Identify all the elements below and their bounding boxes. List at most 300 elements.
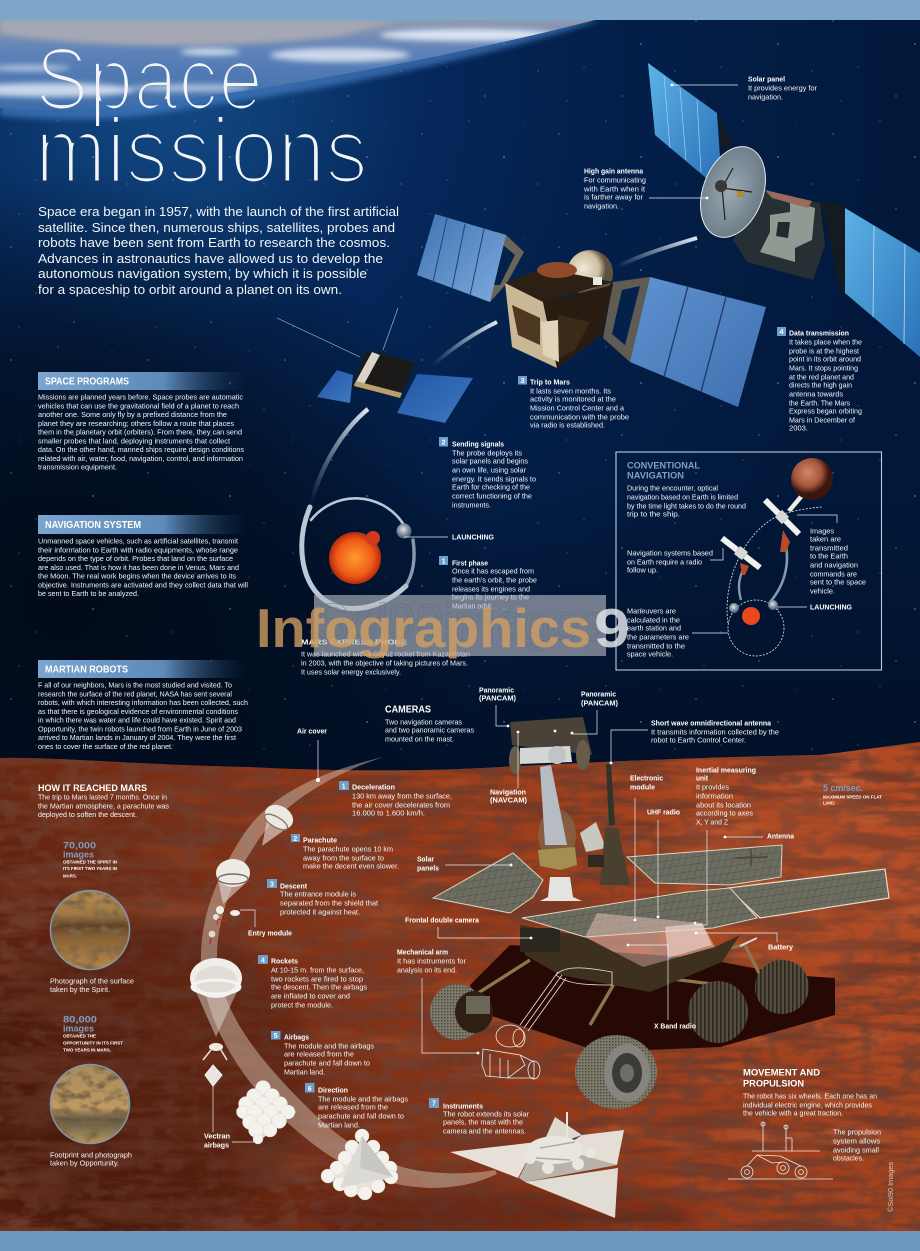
step 5: airbags [271,1031,374,1077]
rover left solar panel [433,853,543,913]
intro paragraph: satellite. Since then, numerous ships, satellites, probes and [38,220,395,235]
label: short wave antenna: robot to Earth Control Center. [651,736,746,745]
text: mars express probe: in 2003, with the objective of taking pictures of Mars. [301,659,468,668]
label: vectran airbags: Vectran [204,1134,230,1141]
dome [567,250,613,296]
title: missions [35,100,368,202]
photo: surface by Spirit: Photograph of the surface [50,976,134,985]
step 2: sending signals: The probe deploys its [452,449,522,458]
probe body [733,190,825,280]
icon: lander petals with small rover [450,1112,624,1218]
label: launching [404,535,495,542]
step 3: trip to mars: 3 [521,378,525,385]
label: inertial measuring unit: information [696,792,733,801]
label: inertial measuring unit [696,768,756,827]
callout: solar panel: It provides energy for [748,84,818,93]
rover suspension [475,938,760,1025]
right solar panel [603,277,766,407]
rover front left wheel [430,984,493,1040]
text: mars express probe: It was launched with a Soyuz rocket from Kazakhstan [301,650,470,659]
icon: parachute capsule [216,859,250,904]
text: maneuvers: the parameters are [627,633,689,642]
icon: sun [329,531,381,584]
step 6: direction: Direction [318,1088,348,1095]
step 4: rockets: are inflated to cover and [271,992,350,1001]
stat: 70,000 images: 70,000 [63,840,96,852]
rover lower mast [540,877,582,901]
panel: navigation system: are also used. That is how it has been done in Venus, Mars and [38,563,239,572]
text: mars express probe: It uses solar energy exclusively. [301,668,401,677]
panel: movement and propulsion: PROPULSION [743,1078,804,1088]
panel: martian robots: robots, with which interesting information has been collected, such [38,698,248,707]
label: inertial measuring unit: X, Y and Z [696,818,729,827]
heading: conventional navigation [627,460,700,482]
photo: footprint by Opportunity: taken by Opportunity. [50,1159,119,1168]
panel: navigation system: be sent to Earth to be analyzed. [38,589,139,598]
step labels for descent [204,781,530,1150]
rover translucent electronics box [585,913,715,967]
callout: solar panel: navigation. [748,93,783,102]
step 3: trip to mars: Mission Control Center and a [530,404,624,413]
label: panoramic right: Panoramic [581,692,616,699]
stat: 80,000 images [63,1014,123,1053]
step 2: sending signals: Sending signals [452,442,504,449]
step 4: data transmission: Mars in December of [789,416,855,425]
label: electronic module: Electronic [630,776,663,783]
text: cameras: CAMERAS [385,704,431,716]
step 4: rockets: the descent. Then the airbags [271,983,367,992]
label: panoramic left [479,688,516,703]
step 3: descent: 3 [270,882,274,889]
step 4: data transmission [777,327,862,433]
label: vectran airbags [204,1134,230,1150]
text: radio follow up: follow up. [627,566,658,575]
step 4: data transmission: 2003. [789,424,808,433]
step 4: data transmission: antenna towards [789,390,843,399]
step 4: data transmission: Data transmission [789,331,849,338]
text: images transmitted: sent to the space [810,578,866,587]
step 2: sending signals: solar panels and begins [452,457,528,466]
step 7: instruments: The robot extends its solar [443,1110,530,1119]
step 4: data transmission: point in its orbit around [789,355,861,364]
callout: solar panel: Solar panel [748,77,785,84]
rover body [520,925,740,992]
photo: footprint by Opportunity: Footprint and photograph [50,1150,132,1159]
label: launching: LAUNCHING [452,535,495,542]
spacecraft: upper probe [617,63,920,357]
panel: space programs: another one. Some only fly by a prefixed distance from the [38,410,227,419]
high gain dish [689,138,777,246]
icon: satellite lower [719,534,763,572]
step 4: rockets [258,955,367,1010]
step 7: instruments: 7 [432,1101,436,1108]
step 5: airbags: are released from the [284,1050,354,1059]
step 3: descent: The entrance module is [280,890,356,899]
callout: high gain antenna: navigation. [584,202,619,211]
step 4: data transmission: Express began orbiting [789,407,862,416]
label: inertial measuring unit: about its location [696,801,751,810]
watermark: Infographics [256,597,591,659]
text: cameras [385,704,474,744]
label: electronic module: module [630,785,655,792]
label: short wave antenna: It transmits information collected by the [651,728,779,737]
icon: opening airbags with petals [321,1129,398,1200]
step 2: sending signals [439,437,536,510]
step 1: deceleration: Deceleration [352,785,395,792]
panel: navigation system: objective. Instruments are activated and they collect data that will [38,580,248,589]
intro paragraph: Space era began in 1957, with the launch of the first artificial [38,204,399,219]
callout: high gain antenna: High gain antenna [584,169,643,176]
descent trajectory band [201,757,497,1188]
label: navigation navcam: (NAVCAM) [490,798,527,805]
text: images transmitted: commands are [810,570,857,579]
navigation orbit diagram [692,458,837,656]
step 4: data transmission: 4 [780,329,784,336]
callout: solar panel [671,77,818,102]
credit: ©Sol90 Images [886,1162,895,1212]
rover right solar panel [728,869,889,918]
callout: high gain antenna: For communicating [584,176,646,185]
step 1: first phase: releases its engines and [452,585,530,594]
step 3: trip to mars: activity is monitored at the [530,395,616,404]
step 2: parachute: make the decent even slower. [303,862,399,871]
text: maneuvers [627,607,689,659]
panel: movement and propulsion: The robot has six wheels. Each one has an [743,1092,877,1101]
step 2: parachute [291,834,399,871]
rover [430,717,889,1109]
text: images transmitted: transmitted [810,544,848,553]
photo: surface by Spirit [50,890,134,994]
orbit ring [302,498,414,608]
label: solar panels: panels [417,866,439,873]
step 2: sending signals: instruments. [452,501,491,510]
text: images transmitted: Images [810,527,834,536]
panel: navigation system: depends on the type of orbit. Probes that land on the surface [38,554,233,563]
step 1: first phase: First phase [452,561,488,568]
step 2: sending signals: energy. It sends signals to [452,475,536,484]
step 2: parachute: away from the surface to [303,854,384,863]
rover rear solar panel [627,845,782,885]
panel: how it reached mars: HOW IT REACHED MARS [38,783,148,794]
stat: maximum speed: 5 cm/sec. [823,783,863,794]
step 2: parachute: The parachute opens 10 km [303,845,393,854]
panel: movement and propulsion: individual electric engine, which provides [743,1101,872,1110]
panel: space programs: Missions are planned years before. Space probes are automatic [38,393,243,402]
intro paragraph: Advances in astronautics have allowed us to develop the [38,251,383,266]
step 7: instruments: Instruments [443,1104,483,1111]
step 4: data transmission: at the red planet and [789,373,854,382]
text: maneuvers: transmitted to the [627,642,685,651]
panel: space programs: related with air, water, food, navigation, control, and information [38,454,243,463]
panel: how it reached mars: The trip to Mars lasted 7 months. Once in [38,793,167,802]
callout: high gain antenna: is farther away for [584,193,644,202]
photo: footprint by Opportunity [50,1064,132,1168]
descent capsules [190,778,398,1200]
step 4: data transmission: directs the high gain [789,381,852,390]
step 6: direction: are released from the [318,1103,388,1112]
panel: space programs: vehicles that can use the gravitational field of a planet to reach [38,401,239,410]
panel: movement and propulsion: system allows [833,1137,880,1146]
rover antenna [606,764,615,826]
launch orbit diagram [302,409,414,608]
text: cameras: Two navigation cameras [385,718,462,727]
space background [0,20,920,780]
stat: 70,000 images: images [63,850,94,860]
step 5: airbags: The module and the airbags [284,1042,374,1051]
rover front camera block [520,928,560,952]
icon: vectran airbag cluster [236,1080,296,1144]
icon: mars [791,458,833,500]
label: mechanical arm: analysis on its end. [397,966,457,975]
step 2: sending signals: 2 [442,440,446,447]
step 4: data transmission: Mars. It stops pointing [789,364,858,373]
label: navigation navcam: Navigation [490,790,526,797]
watermark: 9 [594,597,630,659]
panel: space programs: planet they are researching; others follow a route that places [38,419,234,428]
rover rear wheels [688,960,809,1043]
mars ground [0,740,920,1240]
intro paragraph: autonomous navigation system, by which it is possible [38,266,367,281]
text: cameras: mounted on the mast. [385,735,454,744]
label: vectran airbags: airbags [204,1143,229,1150]
text: encounter: trip to the ship. [627,510,680,519]
step 4: rockets: Rockets [271,959,298,966]
stat: maximum speed: MAXIMUM SPEED ON FLAT [823,795,882,800]
text: encounter: During the encounter, optical [627,484,718,493]
label: air cover: Air cover [297,728,327,736]
trail [617,238,697,267]
photo: surface by Spirit: taken by the Spirit. [50,985,110,994]
step 5: airbags: Airbags [284,1035,309,1042]
step 1: first phase: Martian orbit. [452,602,493,611]
panel: how it reached mars [38,783,169,819]
step 5: airbags: parachute and fall down to [284,1059,370,1068]
rover gold collar [538,847,577,870]
label: uhf radio: UHF radio [647,810,680,817]
step 5: airbags: 5 [274,1033,278,1040]
text: images transmitted: taken are [810,535,841,544]
probe body [505,262,613,368]
rover front right wheel [575,1035,657,1109]
step 4: data transmission: probe is at the highest [789,347,859,356]
stat: 80,000 images: images [63,1024,94,1034]
panel: navigation system: NAVIGATION SYSTEM [45,519,141,531]
stat: 80,000 images: 80,000 [63,1014,97,1026]
icon: entry module [209,906,240,944]
rover shadow [470,945,835,1052]
rover pan cam head [509,717,592,774]
step 3: descent: Descent [280,884,308,891]
step 7: instruments [429,1098,530,1136]
step 3: trip to mars: It lasts seven months. Its [530,387,611,396]
rover mast column [540,765,567,845]
step 3: trip to mars: Trip to Mars [530,380,570,387]
text: mars express probe: MARS EXPRESS PROBE [301,638,407,647]
callout: high gain antenna [583,169,708,211]
icon: air cover capsule [261,778,320,846]
label: frontal double camera: Frontal double camera [405,918,479,925]
stat: 80,000 images: OPPORTUNITY IN ITS FIRST [63,1041,123,1046]
icon: earth positions [729,600,778,613]
step 1: deceleration: 1 [342,783,346,790]
step 2: parachute: Parachute [303,838,337,845]
trail [433,322,497,365]
label: mechanical arm: It has instruments for [397,957,467,966]
text: maneuvers: Maneuvers are [627,607,676,616]
stat: maximum speed: LAND. [823,801,835,806]
step 1: deceleration: 16.000 to 1.600 km/h. [352,809,425,818]
watermark: Sol90images [316,594,604,652]
label: panoramic left: (PANCAM) [479,696,516,703]
step 4: rockets: 4 [261,958,265,965]
text: maneuvers: space vehicle. [627,650,673,659]
text: maneuvers: calculated in the [627,616,680,625]
solar panel lower [820,201,920,357]
spacecraft: trip to mars probe [417,214,766,407]
step 4: data transmission: the Earth. The Mars [789,399,850,408]
title: Space [35,29,263,128]
step 1: deceleration: the air cover decelerates from [352,801,450,810]
step 1: deceleration: 130 km away from the surface, [352,792,452,801]
label: navigation navcam [490,790,527,805]
text: encounter: by the time light takes to do the round [627,502,746,511]
panel: martian robots: ones to cover the surface of the red planet. [38,742,173,751]
label: mechanical arm: Mechanical arm [397,950,448,957]
label: inertial measuring unit: Inertial measuring [696,768,756,775]
icon: satellite upper [761,496,803,538]
heading: conventional navigation: CONVENTIONAL [627,460,700,472]
panel: martian robots: arrived to Martian lands in January of 2004. They were the first [38,733,236,742]
step 6: direction: Martian land. [318,1121,360,1130]
text: radio follow up: Navigation systems based [627,549,713,558]
panel: space programs: them in the planetary orbit (orbiters). From there, they can send [38,428,242,437]
label: short wave antenna [651,721,779,745]
panel: movement and propulsion: MOVEMENT AND [743,1066,820,1078]
stat: 70,000 images: OBTAINED THE SPIRIT IN [63,860,118,865]
step 4: rockets: At 10-15 m. from the surface, [271,966,364,975]
step 1: first phase: 1 [442,558,446,565]
stat: 80,000 images: OBTAINED THE [63,1034,96,1039]
step 1: first phase: begins its journey to the [452,593,529,602]
step 4: rockets: protect the module. [271,1001,333,1010]
label: electronic module [630,776,663,792]
step 6: direction: parachute and fall down to [318,1112,404,1121]
text: cameras: and two panoramic cameras [385,726,474,735]
panel: movement and propulsion: the vehicle with a great traction. [743,1109,843,1118]
step 6: direction: 6 [308,1086,312,1093]
label: mechanical arm [397,950,467,975]
label: solar panels: Solar [417,857,434,864]
panel: movement and propulsion: obstacles. [833,1154,864,1163]
text: images transmitted: to the Earth [810,552,848,561]
text: encounter [627,484,746,519]
step 7: instruments: panels, the mast with the [443,1118,523,1127]
step 2: parachute: 2 [293,836,297,843]
step 3: descent [267,879,378,917]
label: inertial measuring unit: It provides [696,783,729,792]
label: antenna: Antenna [767,834,794,841]
title [35,29,368,202]
panel: martian robots: as that there is geological evidence of environmental conditions [38,707,238,716]
panel: conventional navigation [616,452,882,670]
label: inertial measuring unit: unit [696,776,709,783]
step 4: rockets: two rockets are fired to stop [271,975,363,984]
panel: martian robots: MARTIAN ROBOTS [45,664,128,676]
spacecraft: first small probe [277,308,473,423]
panel: movement and propulsion [728,1066,881,1179]
step 1: deceleration [339,781,452,818]
text: images transmitted: and navigation [810,561,858,570]
step 4: data transmission: It takes place when the [789,338,862,347]
step 2: sending signals: an own life, using solar [452,466,527,475]
stat: 70,000 images: ITS FIRST TWO YEARS IN [63,866,118,871]
text: maneuvers: earth station and [627,624,681,633]
text: mars express probe [301,638,470,677]
step 3: descent: protected it against heat. [280,908,360,917]
icon: rover side diagram [728,1122,833,1179]
step 1: first phase: the earth's orbit, the probe [452,576,537,585]
stat: maximum speed [823,783,882,806]
panel: space programs: smaller probes that land, deploying instruments that collect [38,436,230,445]
panel: martian robots: F all of our neighbors, Mars is the most studied and visited. To [38,681,232,690]
panel: space programs: data. On the other hand, manned ships require design conditions [38,445,244,454]
intro paragraph: for a spaceship to orbit around a planet on its own. [38,282,342,297]
step 1: first phase: Once it has escaped from [452,567,534,576]
panel: space programs [38,372,248,472]
text: radio follow up [627,549,713,575]
rover instruments cluster [538,809,630,885]
rover text labels [297,688,882,1031]
stat: 70,000 images [63,840,118,879]
panel: navigation system: their information to Earth with radio equipments, whose range [38,545,238,554]
panel: movement and propulsion: avoiding small [833,1146,879,1155]
earth limb [0,20,600,119]
step 2: sending signals: correct functioning of the [452,492,532,501]
panel: how it reached mars: deployed to soften the descent. [38,810,137,819]
label: panoramic right [581,692,618,708]
heading: conventional navigation: NAVIGATION [627,470,684,482]
icon: large parachute with lander [190,958,242,1086]
stat: 80,000 images: TWO YEARS IN MARS. [63,1048,111,1053]
panel: space programs: transmission equipment. [38,463,117,472]
label: x band radio: X Band radio [654,1024,696,1031]
step 1: first phase [439,556,537,611]
intro paragraph: robots have been sent from Earth to research the cosmos. [38,235,390,250]
text: images transmitted [810,527,866,596]
panel: how it reached mars: the Martian atmosphere, a parachute was [38,801,169,810]
stat: 70,000 images: MARS. [63,874,77,879]
panel: martian robots [38,660,248,751]
label: panoramic right: (PANCAM) [581,701,618,708]
text: radio follow up: on Earth require a radio [627,558,702,567]
step 3: trip to mars: via radio is established. [530,421,605,430]
trail toward probe [311,409,368,503]
panel: movement and propulsion: The propulsion [833,1128,881,1137]
step 5: airbags: Martian land. [284,1068,325,1077]
panel: martian robots: in which there was water and life could have existed. Spirit and [38,716,236,725]
step 6: direction: The module and the airbags [318,1095,408,1104]
step 6: direction [305,1083,408,1130]
rover leader lines [213,705,777,1142]
panel: navigation system [38,515,248,598]
icon: sun small [742,607,760,625]
left solar panel [417,214,524,302]
panel: space programs: SPACE PROGRAMS [45,376,129,388]
panel: martian robots: Opportunity, the twin robots launched from Earth in June of 2003 [38,724,242,733]
solar panel upper [648,63,733,178]
intro paragraph [38,204,399,297]
label: short wave antenna: Short wave omnidirectional antenna [651,721,771,728]
